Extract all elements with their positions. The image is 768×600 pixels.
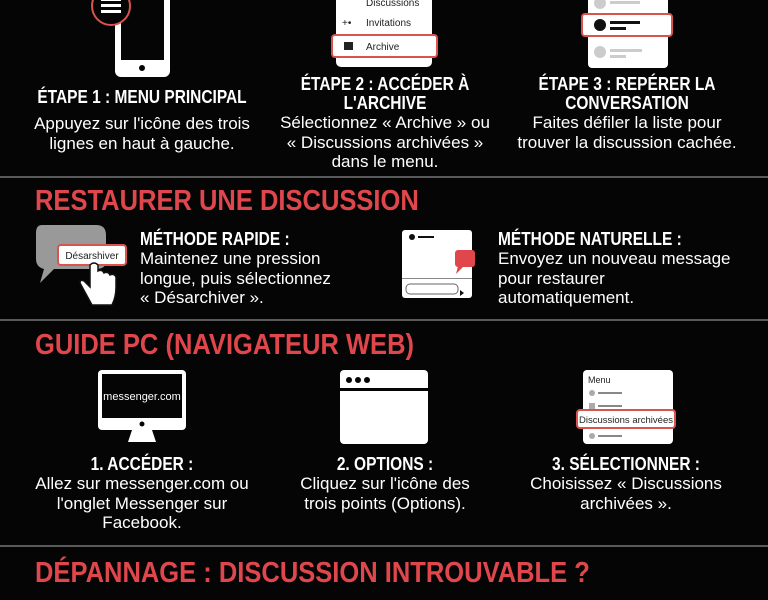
text: méthode naturelle: pour restaurer [498,268,605,288]
icon: désarchiver bubble with hand [36,225,127,306]
icon: menu archived: Discussions archivées [579,415,673,426]
step 2 text: « Discussions archivées » [287,132,483,152]
pc step 1 text: 1. ACCÉDER : [91,454,193,474]
pc step 3 text [530,454,722,512]
icon: archive menu: Archive [366,42,400,53]
step 1 text: lignes en haut à gauche. [49,134,235,152]
icon: menu archived [576,370,676,444]
text: méthode naturelle [498,228,730,307]
icon: menu archived: Menu [588,375,611,385]
step 3 text: CONVERSATION [565,93,689,113]
pc step 2 text: trois points (Options). [304,494,466,512]
heading: dépannage: DÉPANNAGE : DISCUSSION INTROUVABLE ? [35,557,590,589]
step 2 text: ÉTAPE 2 : ACCÉDER À [301,74,469,94]
text: méthode naturelle: Envoyez un nouveau message [498,249,730,268]
icon: browser window [340,370,428,444]
pc step 1 text: l'onglet Messenger sur [57,494,227,512]
icon: chat window [402,230,475,298]
icon: monitor [98,370,186,442]
step 2 text [280,74,490,171]
icon: conversation list [581,0,673,68]
text: méthode rapide: MÉTHODE RAPIDE : [140,229,290,249]
step 1 text: ÉTAPE 1 : MENU PRINCIPAL [37,87,247,107]
heading: guide pc: GUIDE PC (NAVIGATEUR WEB) [35,329,414,361]
icon: archive menu: Invitations [366,18,411,29]
step 1 text [34,86,250,152]
icon: désarchiver bubble with hand: Désarshiver [65,251,119,262]
icon: archive menu: +• [342,18,352,29]
text: méthode rapide [140,228,331,307]
step 2 text: Sélectionnez « Archive » ou [280,113,490,132]
pc step 2 text [300,454,470,512]
heading: restaurer: RESTAURER UNE DISCUSSION [35,185,419,217]
text: méthode rapide: « Désarchiver ». [140,288,264,307]
pc step 2 text: 2. OPTIONS : [337,454,433,474]
pc step 3 text: archivées ». [580,494,672,512]
pc step 3 text: Choisissez « Discussions [530,474,722,493]
text: méthode naturelle: MÉTHODE NATURELLE : [498,229,682,249]
step 2 text: dans le menu. [332,152,438,171]
text: méthode naturelle: automatiquement. [498,288,634,307]
step 2 text: L'ARCHIVE [344,93,426,113]
pc step 1 text [35,454,249,532]
text: méthode rapide: Maintenez une pression [140,249,321,268]
step 3 text [517,74,737,152]
pc step 3 text: 3. SÉLECTIONNER : [552,454,700,474]
pc step 1 text: Allez sur messenger.com ou [35,474,249,493]
icon: monitor: messenger.com [103,391,181,403]
text: méthode rapide: longue, puis sélectionnez [140,268,331,288]
step 3 text: trouver la discussion cachée. [517,132,737,152]
pc step 1 text: Facebook. [102,513,182,532]
pc step 2 text: Cliquez sur l'icône des [300,474,470,493]
icon: phone with menu [91,0,170,77]
step 3 text: Faites défiler la liste pour [533,113,721,132]
step 1 text: Appuyez sur l'icône des trois [34,114,250,133]
icon: archive menu [331,0,438,67]
step 3 text: ÉTAPE 3 : REPÉRER LA [539,74,715,94]
